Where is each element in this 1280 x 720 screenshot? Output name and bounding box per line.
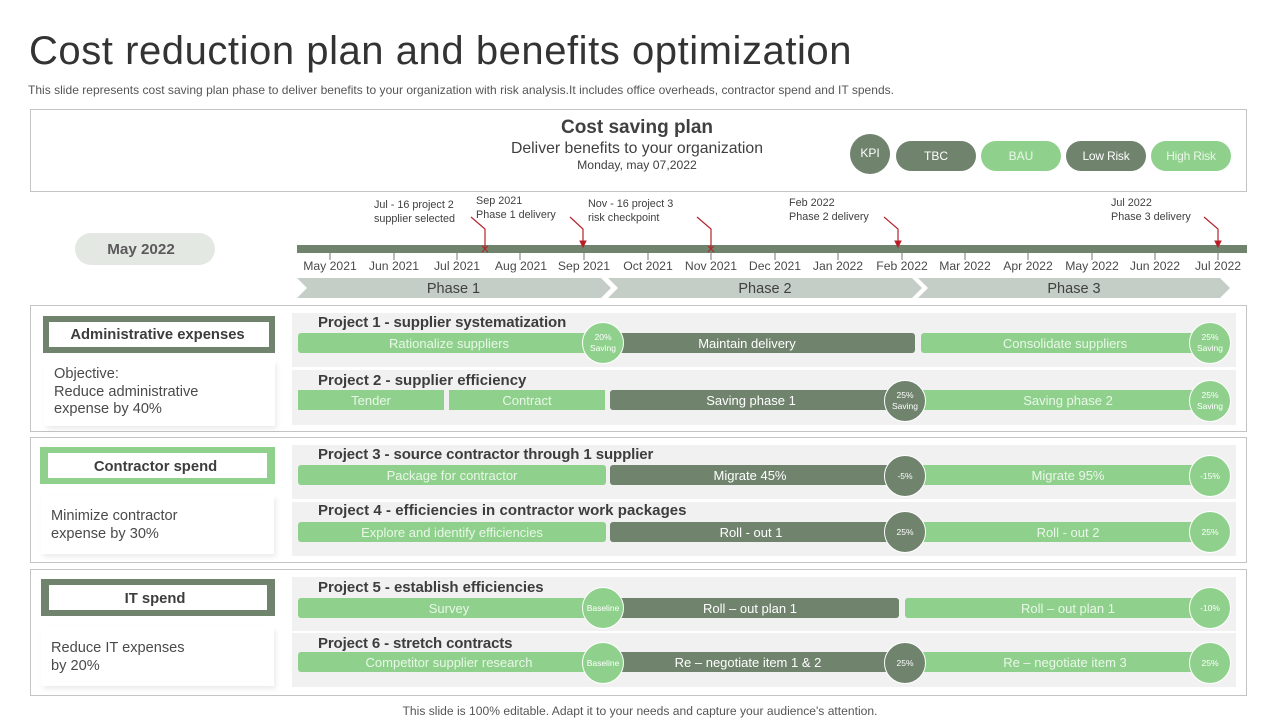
saving circle 25% light: Saving: [1197, 401, 1223, 411]
objective: Reduce IT expenses: [51, 640, 185, 656]
bar: Re negotiate item 3: [903, 652, 1211, 672]
bar: Roll - out 1: [610, 522, 900, 542]
category heading: Administrative expenses: [70, 326, 245, 342]
legend: Low Risk: Low Risk: [1082, 149, 1130, 163]
objective: [44, 361, 275, 426]
legend: KPI: [850, 134, 890, 174]
milestone note: Jul 16 project 2: [374, 199, 455, 224]
milestone note: Jul 16 project 2: Jul - 16 project 2: [374, 199, 454, 211]
saving circle 20%: Saving: [590, 343, 616, 353]
bar: Tender: Tender: [351, 392, 391, 408]
month labels: Oct 2021: [623, 259, 673, 273]
month ticks: [330, 253, 1218, 260]
milestone note: Sep 2021: [476, 195, 556, 220]
phase 1 chevron: Phase 1: [427, 281, 480, 297]
project 4 title: Project 4 - efficiencies in contractor work packages: [318, 502, 687, 519]
circle 25% dark: [884, 642, 926, 684]
legend: BAU: BAU: [1009, 149, 1033, 163]
circle -10%: [1189, 587, 1231, 629]
bar: Roll out plan 1 dark: Roll – out plan 1: [703, 600, 797, 616]
saving circle 25% light: [1189, 380, 1231, 422]
category heading: [41, 579, 275, 616]
bar: Package for contractor: Package for contractor: [387, 468, 517, 482]
bar: Roll - out 1: Roll - out 1: [720, 524, 782, 540]
project 3 title: Project 3 - source contractor through 1 supplier: [318, 446, 653, 463]
timeline: [297, 216, 1247, 298]
legend: Low Risk: [1066, 141, 1146, 171]
category heading: Contractor spend: [94, 458, 217, 474]
month labels: May 2022: [1065, 259, 1119, 273]
month labels: Aug 2021: [495, 259, 547, 273]
milestone note: Jul 2022: [1111, 197, 1191, 222]
bar: Explore and identify efficiencies: Explore and identify efficiencies: [361, 524, 543, 540]
header date: Monday, may 07,2022: [577, 158, 697, 172]
current month badge: [75, 233, 215, 265]
saving circle 25% dark: Saving: [892, 401, 918, 411]
current month badge: May 2022: [107, 240, 175, 258]
month labels: May 2021: [303, 259, 357, 273]
saving circle 25% dark: [884, 380, 926, 422]
objective: expense by 40%: [54, 401, 162, 417]
month labels: Feb 2022: [876, 259, 928, 273]
bar: Consolidate suppliers: Consolidate suppliers: [1003, 336, 1127, 350]
milestone note: Jul 16 project 2: supplier selected: [374, 212, 455, 224]
circle 25% light: 25%: [1201, 526, 1218, 536]
saving circle 25% light: 25%: [1201, 390, 1218, 400]
milestone note: Sep 2021: Phase 1 delivery: [476, 208, 556, 220]
circle -5%: [884, 455, 926, 497]
bar: Migrate 45%: [610, 465, 900, 485]
bar: Tender: [298, 390, 444, 410]
month labels: Apr 2022: [1003, 259, 1053, 273]
objective: Minimize contractor: [51, 508, 178, 524]
legend: BAU: [981, 141, 1061, 171]
circle 25% light: [1189, 642, 1231, 684]
circle -15%: [1189, 455, 1231, 497]
bar: Competitor supplier research: [298, 652, 600, 672]
circle 25% dark: [884, 511, 926, 553]
project 6 title: Project 6 - stretch contracts: [318, 635, 512, 652]
bar: Contract: Contract: [502, 392, 552, 408]
circle Baseline: [582, 587, 624, 629]
project 2 title: Project 2 - supplier efficiency: [318, 372, 526, 389]
objective: [41, 495, 274, 554]
bar: Migrate 45%: Migrate 45%: [714, 468, 786, 482]
bar: Rationalize suppliers: Rationalize suppliers: [389, 336, 509, 350]
subtitle: This slide represents cost saving plan phase to deliver benefits to your organization with risk analysis.It includes office overheads, contractor spend and IT spends.: [28, 83, 894, 97]
bar: Contract: [449, 390, 605, 410]
project 1 row: [292, 313, 1236, 367]
timeline bar: [297, 245, 1247, 253]
bar: Explore and identify efficiencies: [298, 522, 606, 542]
title: Cost reduction plan and benefits optimization: [29, 29, 852, 73]
circle 25% dark: 25%: [896, 526, 914, 536]
month labels: Sep 2021: [558, 259, 610, 273]
circle -15%: -15%: [1200, 470, 1220, 480]
month labels: Jul 2022: [1195, 259, 1241, 273]
month labels: Jan 2022: [813, 259, 863, 273]
milestone note: Jul 2022: Phase 3 delivery: [1111, 210, 1191, 222]
milestone marker: Sep 2021: [570, 217, 586, 247]
objective: Objective:: [54, 366, 119, 382]
bar: Re negotiate item 1 and 2: [593, 652, 903, 672]
milestone note: Feb 2022: [789, 197, 869, 222]
saving circle 20%: 20%: [594, 332, 612, 342]
objective: [41, 627, 274, 686]
bar: Roll out plan 1 light: [905, 598, 1211, 618]
saving circle 25%: [1189, 322, 1231, 364]
circle 25% light: 25%: [1201, 658, 1218, 668]
bar: Survey: [298, 598, 600, 618]
bar: Saving phase 2: Saving phase 2: [1023, 392, 1113, 408]
phase 1 chevron: [297, 278, 611, 298]
bar: Roll out plan 1 light: Roll – out plan 1: [1021, 600, 1115, 616]
panel: administrative expenses: [30, 305, 1247, 432]
milestone marker: Feb 2022: [884, 217, 901, 247]
category heading: [40, 447, 275, 484]
saving circle 25% dark: 25%: [896, 390, 914, 400]
milestone note: Feb 2022: Phase 2 delivery: [789, 210, 869, 222]
month labels: Jun 2022: [1130, 259, 1180, 273]
month labels: Jul 2021: [434, 259, 480, 273]
month labels: Jun 2021: [369, 259, 419, 273]
phase 3 chevron: Phase 3: [1047, 281, 1101, 297]
phase 2 chevron: Phase 2: [738, 281, 792, 297]
bar: Maintain delivery: [593, 333, 915, 353]
circle 25% light: [1189, 511, 1231, 553]
project 3 row: [292, 445, 1236, 499]
milestone note: Nov 16 project 3: Nov - 16 project 3: [588, 198, 673, 210]
bar: Roll - out 2: Roll - out 2: [1037, 524, 1099, 540]
milestone marker: Nov 16 project 3: [697, 217, 714, 252]
legend: High Risk: [1151, 141, 1231, 171]
project 5 row: [292, 577, 1236, 631]
project 6 row: [292, 633, 1236, 687]
bar: Package for contractor: [298, 465, 606, 485]
project 1 title: Project 1 - supplier systematization: [318, 314, 566, 331]
saving circle 25%: Saving: [1197, 343, 1223, 353]
bar: Re negotiate item 1 and 2: Re – negotiate item 1 & 2: [675, 654, 821, 670]
legend: KPI: KPI: [860, 146, 880, 160]
legend: TBC: TBC: [924, 149, 948, 163]
milestone marker: Jul 2022: [1204, 217, 1221, 247]
bar: Rationalize suppliers: [298, 333, 600, 353]
category heading: IT spend: [125, 590, 185, 606]
milestone note: Nov 16 project 3: risk checkpoint: [588, 212, 659, 224]
bar: Re negotiate item 3: Re – negotiate item 3: [1003, 654, 1127, 670]
objective: expense by 30%: [51, 526, 159, 542]
footer note: This slide is 100% editable. Adapt it to your needs and capture your audience's attention.: [403, 704, 877, 718]
milestone note: Jul 2022: Jul 2022: [1111, 197, 1152, 209]
circle Baseline: [582, 642, 624, 684]
panel: IT spend: [30, 569, 1247, 696]
month labels: Nov 2021: [685, 259, 737, 273]
project 5 title: Project 5 - establish efficiencies: [318, 579, 544, 596]
bar: Migrate 95%: Migrate 95%: [1032, 468, 1104, 482]
month labels: Mar 2022: [939, 259, 991, 273]
circle 25% dark: 25%: [896, 658, 914, 668]
bar: Maintain delivery: Maintain delivery: [698, 336, 796, 350]
month labels: Dec 2021: [749, 259, 801, 273]
header title: Cost saving plan: [561, 117, 713, 138]
milestone note: Nov 16 project 3: [588, 198, 673, 224]
bar: Saving phase 2: [903, 390, 1211, 410]
legend: High Risk: High Risk: [1166, 149, 1216, 163]
saving circle 20%: [582, 322, 624, 364]
legend: TBC: [896, 141, 976, 171]
panel: contractor spend: [30, 437, 1247, 563]
project 4 row: [292, 502, 1236, 556]
bar: Competitor supplier research: Competitor supplier research: [366, 654, 532, 670]
circle -10%: -10%: [1200, 602, 1220, 612]
bar: Consolidate suppliers: [921, 333, 1211, 353]
panel: cost saving plan header: [30, 109, 1247, 192]
category heading: [43, 316, 275, 353]
circle Baseline: Baseline: [587, 602, 619, 612]
milestone note: Sep 2021: Sep 2021: [476, 195, 522, 207]
objective: Reduce administrative: [54, 384, 198, 400]
bar: Saving phase 1: Saving phase 1: [706, 392, 796, 408]
milestone note: Feb 2022: Feb 2022: [789, 197, 835, 209]
bar: Survey: Survey: [429, 600, 469, 616]
bar: Migrate 95%: [903, 465, 1211, 485]
phase 2 chevron: [608, 278, 922, 298]
month labels: [303, 259, 1241, 273]
saving circle 25%: 25%: [1201, 332, 1218, 342]
project 2 row: [292, 370, 1236, 425]
milestone marker: Jul 16 project 2: [471, 217, 488, 252]
bar: Roll - out 2: [903, 522, 1211, 542]
circle Baseline: Baseline: [587, 658, 619, 668]
phase 3 chevron: [918, 278, 1230, 298]
bar: Saving phase 1: [610, 390, 900, 410]
objective: by 20%: [51, 658, 100, 674]
bar: Roll out plan 1 dark: [593, 598, 899, 618]
header subtitle: Deliver benefits to your organization: [511, 140, 763, 157]
circle -5%: -5%: [897, 470, 913, 480]
